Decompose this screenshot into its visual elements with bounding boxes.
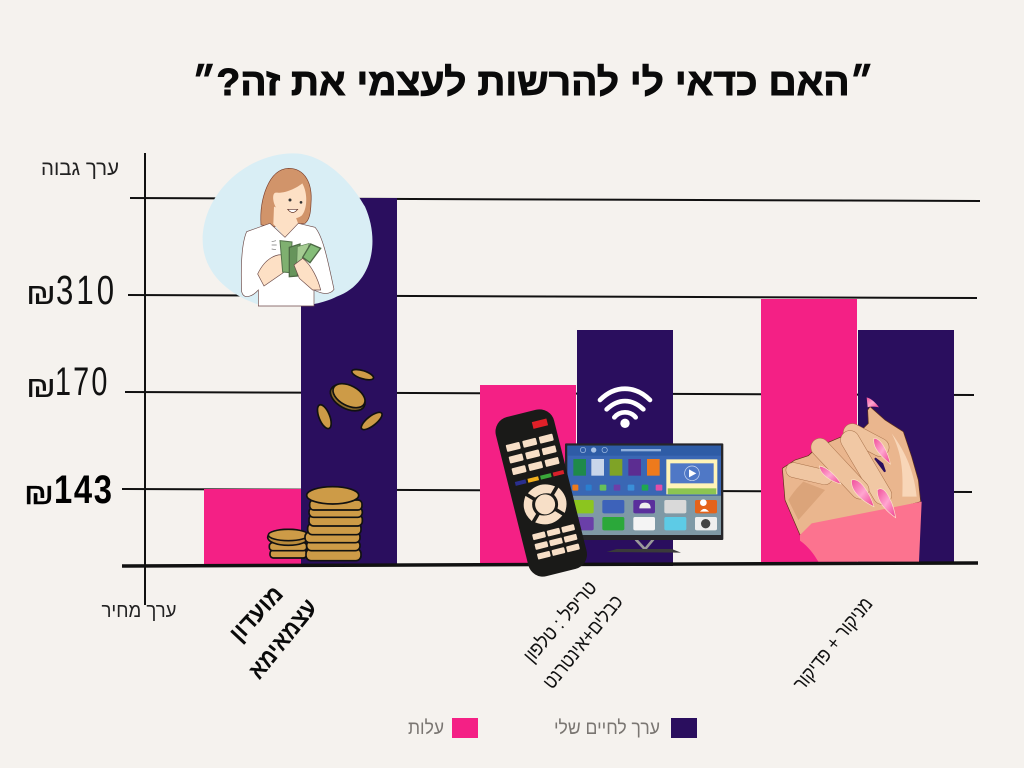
category label: phone and cables: כבלים+אינטרנט [539, 591, 628, 693]
illustration: gold coins [268, 367, 385, 561]
illustration: remote control [492, 406, 590, 580]
back of hand [782, 407, 921, 535]
x axis [122, 563, 978, 566]
bar chart [204, 198, 954, 566]
bar: club value [301, 198, 397, 565]
flying coins [315, 367, 385, 432]
legend label: cost: עלות [408, 718, 444, 739]
category label: manicure and pedicure: מניקור + פדיקור [789, 593, 877, 695]
bar: manicure value [858, 330, 954, 563]
tv frame [565, 443, 723, 540]
icon: wifi [600, 389, 650, 428]
power button [532, 419, 548, 429]
colour buttons [515, 470, 564, 486]
bar: telecom value [577, 330, 673, 566]
nails [819, 397, 896, 518]
y axis label: high value: ערך גבוה [41, 157, 119, 180]
y axis value: 143 [24, 467, 114, 512]
category label: phone and cables: טריפל : טלפון [519, 577, 602, 667]
y axis value: 143: 143 [54, 467, 114, 512]
legend label: value: ערך לחיים שלי [554, 718, 660, 739]
blob [203, 153, 372, 306]
legend swatch: cost [452, 718, 478, 738]
bar: manicure cost [761, 299, 857, 564]
shirt [241, 223, 334, 306]
y axis [144, 153, 146, 605]
sleeve [800, 502, 922, 562]
illustration: television [565, 443, 723, 553]
bar: telecom cost [480, 385, 576, 566]
y axis value: 170: ₪ [26, 371, 56, 404]
bottom buttons [532, 524, 580, 560]
legend [408, 718, 697, 739]
y axis value: 310: ₪ [26, 278, 56, 311]
neck [273, 207, 298, 237]
illustration: manicured hand [782, 397, 922, 562]
banknotes [280, 241, 292, 273]
face [273, 183, 306, 218]
category label: independent mother club: עצמאימא [243, 594, 323, 684]
illustration: woman with money [203, 153, 372, 306]
hands [258, 255, 290, 286]
y axis value: 170 [26, 359, 110, 404]
category label: independent mother club: מועדון [224, 581, 289, 647]
tv stand [636, 539, 653, 549]
y axis value: 143: ₪ [24, 478, 54, 511]
directional pad [519, 480, 571, 529]
fingers [793, 433, 882, 495]
legend swatch: value [671, 718, 697, 738]
tv screen [567, 446, 721, 496]
hair [261, 168, 311, 227]
y axis value: 170: 170 [55, 359, 110, 404]
tall coin stack [305, 487, 362, 561]
bar: club cost [204, 489, 301, 565]
y axis value: 310: 310 [56, 267, 117, 313]
gap between fingers [875, 458, 885, 472]
y axis value: 310 [26, 267, 117, 313]
number buttons [506, 434, 560, 475]
x axis label: price value: ערך מחיר [102, 600, 176, 622]
title: ״האם כדאי לי להרשות לעצמי את זה?״ [192, 62, 874, 104]
app tiles [573, 459, 586, 476]
small coin stack [268, 529, 309, 558]
